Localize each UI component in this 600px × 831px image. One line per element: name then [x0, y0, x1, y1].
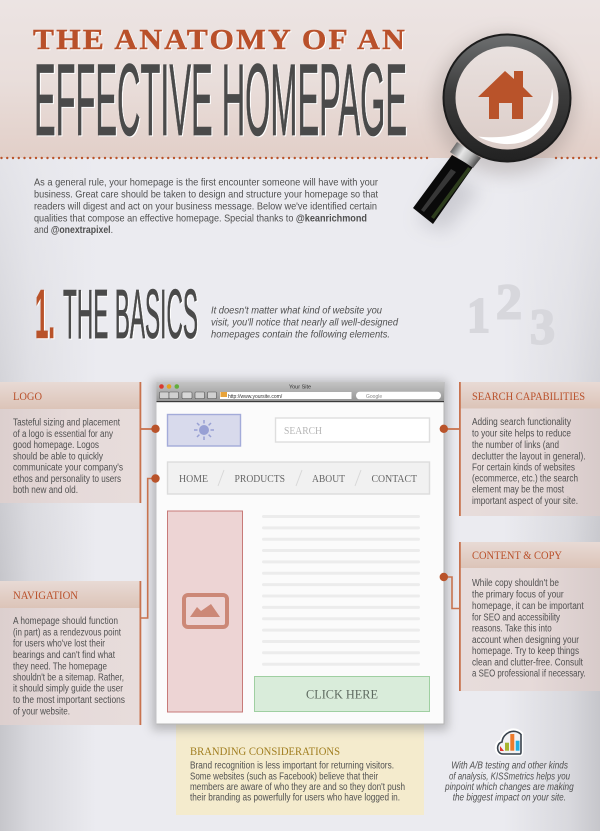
title: THE ANATOMY OF AN: [33, 25, 407, 56]
icon: 1 2 3 numerals: 2: [496, 273, 522, 329]
header band: [0, 0, 600, 158]
panel: search capabilities: (ecommerce, etc.) the search: [472, 474, 578, 484]
navigation bar: PRODUCTS: [234, 474, 285, 485]
panel: search capabilities: important aspect of your site.: [472, 496, 578, 507]
connector: content: [440, 573, 459, 608]
panel: navigation: to the most important sections: [13, 695, 125, 706]
panel: navigation: bearings and can't find what: [13, 650, 115, 661]
image placeholder column: [168, 511, 242, 712]
section intro text: It doesn't matter what kind of website you: [211, 306, 382, 316]
title: [33, 25, 407, 157]
panel: navigation: (in part) as a rendezvous point: [13, 628, 121, 638]
panel: logo: [0, 382, 141, 503]
panel: branding considerations: BRANDING CONSIDERATIONS: [190, 746, 340, 758]
click here button: CLICK HERE: [306, 686, 378, 702]
connector: navigation: [141, 474, 160, 618]
navigation bar: CONTACT: [372, 474, 418, 485]
intro text block: [34, 176, 378, 236]
panel: navigation: it should simply guide the user: [13, 684, 124, 694]
logo placeholder: [168, 414, 240, 446]
panel: search capabilities: For certain kinds of websites: [472, 462, 575, 474]
panel: logo: should be able to quickly: [13, 452, 103, 462]
navigation bar: HOME: [179, 474, 208, 485]
icon: magnifying glass over a house: [413, 34, 575, 232]
panel: logo: of a logo is essential for any: [13, 429, 113, 440]
panel: content and copy: [459, 542, 600, 691]
panel: search capabilities: element may be the most: [472, 484, 564, 496]
panel: content and copy: account when designing your: [472, 635, 580, 646]
panel: logo: both new and old.: [13, 485, 78, 496]
icon: 1 2 3 numerals: 1: [467, 287, 490, 343]
panel: branding considerations: their branding as powerfully for users who have logged in.: [190, 792, 400, 804]
KISSmetrics note: With A/B testing and other kinds: [451, 760, 568, 772]
KISSmetrics note: the biggest impact on your site.: [453, 792, 566, 804]
KISSmetrics note: pinpoint which changes are making: [444, 782, 574, 793]
icon: 1 2 3 numerals: 3: [530, 298, 555, 354]
section intro text: homepages contain the following elements.: [211, 330, 390, 340]
panel: content and copy: CONTENT & COPY: [472, 550, 563, 562]
panel: search capabilities: the number of links (and: [472, 440, 559, 451]
connector: logo: [141, 425, 160, 433]
panel: search capabilities: Adding search functionality: [472, 417, 571, 428]
panel: logo: ethos and personality to users: [13, 474, 121, 485]
panel: navigation: shouldn't be a sitemap. Rather,: [13, 672, 124, 684]
search box: [276, 418, 430, 442]
panel: search capabilities: [459, 382, 600, 516]
KISSmetrics note: [444, 760, 574, 804]
section heading: 1. The Basics: [35, 275, 198, 353]
panel: search capabilities: SEARCH CAPABILITIES: [472, 391, 585, 403]
panel: search capabilities: to your site helps to reduce: [472, 428, 571, 440]
panel: navigation: [0, 581, 141, 725]
panel: branding considerations: [176, 720, 424, 815]
intro text block: and @onextrapixel.: [34, 224, 113, 236]
panel: logo: good homepage. Logos: [13, 440, 99, 451]
infographic canvas: THE BASICS: [63, 275, 198, 353]
browser window mockup: http://www.yoursite.com/: [228, 394, 283, 400]
panel: navigation: of your website.: [13, 706, 70, 718]
connector: search: [440, 425, 459, 433]
KISSmetrics note: of analysis, KISSmetrics helps you: [449, 772, 570, 782]
panel: logo: Tasteful sizing and placement: [13, 418, 120, 428]
panel: logo: communicate your company's: [13, 462, 123, 474]
panel: navigation: for users who've lost their: [13, 638, 106, 650]
panel: branding considerations: members are aware of who they are and so they don't push: [190, 782, 405, 793]
section intro text: [211, 306, 398, 340]
intro text block: business. Great care should be taken to design and structure your homepage so that: [34, 188, 378, 200]
panel: logo: LOGO: [13, 391, 42, 403]
panel: content and copy: reasons. Take this into: [472, 624, 552, 634]
icon: 1 2 3 numerals: [467, 273, 555, 354]
click here button: [254, 676, 430, 712]
panel: content and copy: While copy shouldn't be: [472, 578, 559, 589]
panel: navigation: they need. The homepage: [13, 662, 107, 672]
browser window mockup: Google: [366, 394, 382, 400]
panel: branding considerations: Brand recognition is less important for returning visitors.: [190, 760, 394, 772]
panel: navigation: A homepage should function: [13, 616, 118, 627]
navigation bar: [168, 462, 430, 494]
panel: content and copy: the primary focus of your: [472, 590, 564, 600]
search box: SEARCH: [284, 426, 322, 437]
browser window mockup: Your Site: [289, 384, 311, 390]
panel: content and copy: for SEO and accessibility: [472, 612, 560, 624]
browser window mockup: [152, 380, 448, 730]
section intro text: visit, you'll notice that nearly all well-designed: [211, 318, 398, 328]
intro text block: qualities that compose an effective homepage. Special thanks to @keanrichmond: [34, 212, 367, 224]
intro text block: As a general rule, your homepage is the first encounter someone will have with your: [34, 176, 378, 188]
intro text block: readers will digest and act on your business message. Below we've identified certain: [34, 200, 377, 212]
navigation bar: ABOUT: [312, 474, 346, 485]
section heading: 1. The Basics: 1.: [35, 275, 55, 353]
icon: KISSmetrics heart chart: [496, 730, 522, 755]
panel: navigation: NAVIGATION: [13, 590, 79, 602]
panel: branding considerations: Some websites (such as Facebook) believe that their: [190, 772, 379, 782]
panel: content and copy: homepage. Try to keep things: [472, 646, 579, 657]
body copy placeholder lines: [262, 515, 420, 666]
